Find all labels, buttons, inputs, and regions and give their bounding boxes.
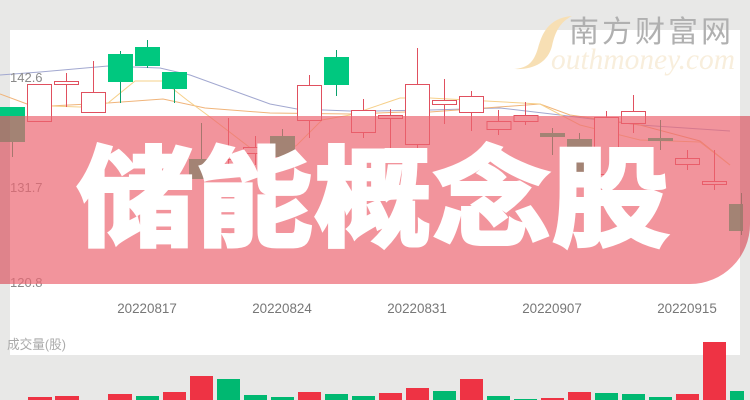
moving average lines — [0, 66, 730, 165]
label 120.8: 120.8 — [10, 275, 43, 290]
y axis labels — [10, 70, 43, 290]
date 20220915: 20220915 — [657, 301, 717, 316]
watermark chinese name: 南方财富网 — [569, 16, 734, 49]
candlesticks — [28, 48, 726, 190]
pink title banner — [0, 116, 750, 284]
date 20220824: 20220824 — [252, 301, 312, 316]
label 142.6: 142.6 — [10, 70, 43, 85]
watermark logo crescent — [514, 16, 572, 69]
candle wicks rising — [40, 48, 714, 190]
candle bodies falling — [0, 47, 743, 231]
date 20220817: 20220817 — [117, 301, 177, 316]
rising volume bars — [28, 342, 726, 400]
volume bars — [28, 342, 744, 400]
date 20220831: 20220831 — [387, 301, 447, 316]
x axis dates — [117, 301, 717, 316]
watermark domain: outhmoney.com — [551, 43, 735, 76]
label 131.7: 131.7 — [10, 180, 43, 195]
falling volume bars — [136, 379, 744, 400]
title: 储能概念股 — [77, 139, 671, 260]
volume axis label: 成交量(股) — [7, 337, 66, 352]
date 20220907: 20220907 — [522, 301, 582, 316]
candle bodies rising — [28, 82, 726, 184]
chart panel background — [10, 30, 740, 355]
darker banner edges over grey margin — [0, 116, 750, 284]
candle wicks falling — [12, 40, 742, 235]
